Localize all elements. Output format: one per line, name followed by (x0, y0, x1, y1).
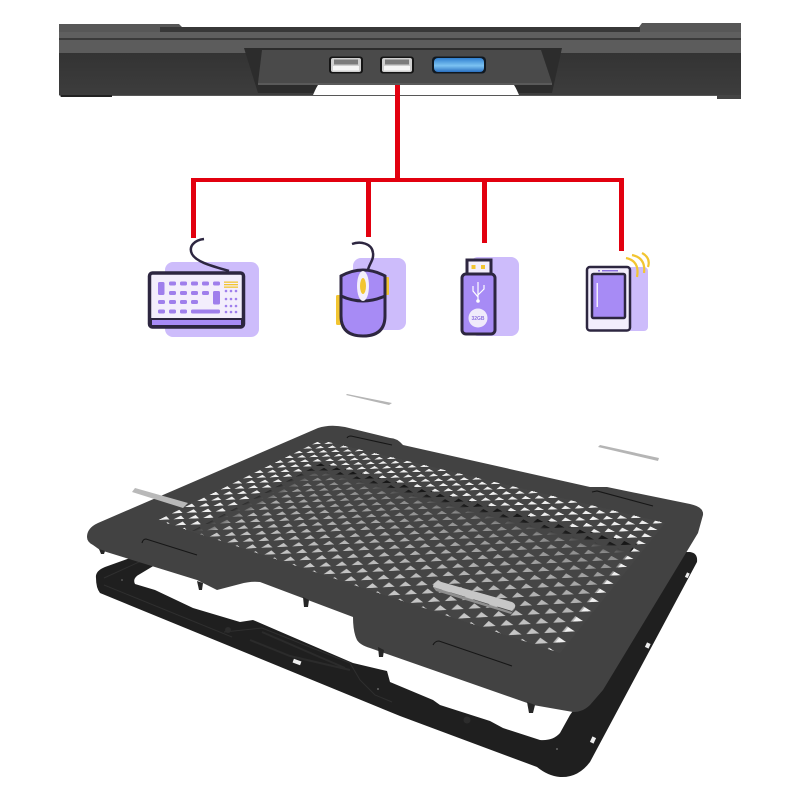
text: capacity: 32GB (471, 316, 485, 322)
strip: top handle (346, 394, 392, 405)
plate slots (142, 436, 653, 666)
USB port right (380, 56, 414, 74)
red connector lines (191, 85, 624, 251)
bottom frame of the cooler (96, 500, 697, 777)
icon: mouse (336, 243, 406, 336)
device: cooler front edge (59, 23, 741, 99)
strip: left handle (132, 488, 188, 508)
mesh: plate perforation (159, 442, 662, 651)
mounting clips (99, 549, 535, 713)
icon: tablet with wireless (587, 253, 649, 331)
USB port left (329, 56, 363, 74)
blue power button (432, 56, 486, 74)
perforated top plate (87, 426, 703, 713)
icon: keyboard (150, 239, 259, 337)
icon: USB drive (462, 257, 519, 336)
strip: centre handle (433, 581, 515, 614)
strip: right handle (598, 445, 659, 461)
